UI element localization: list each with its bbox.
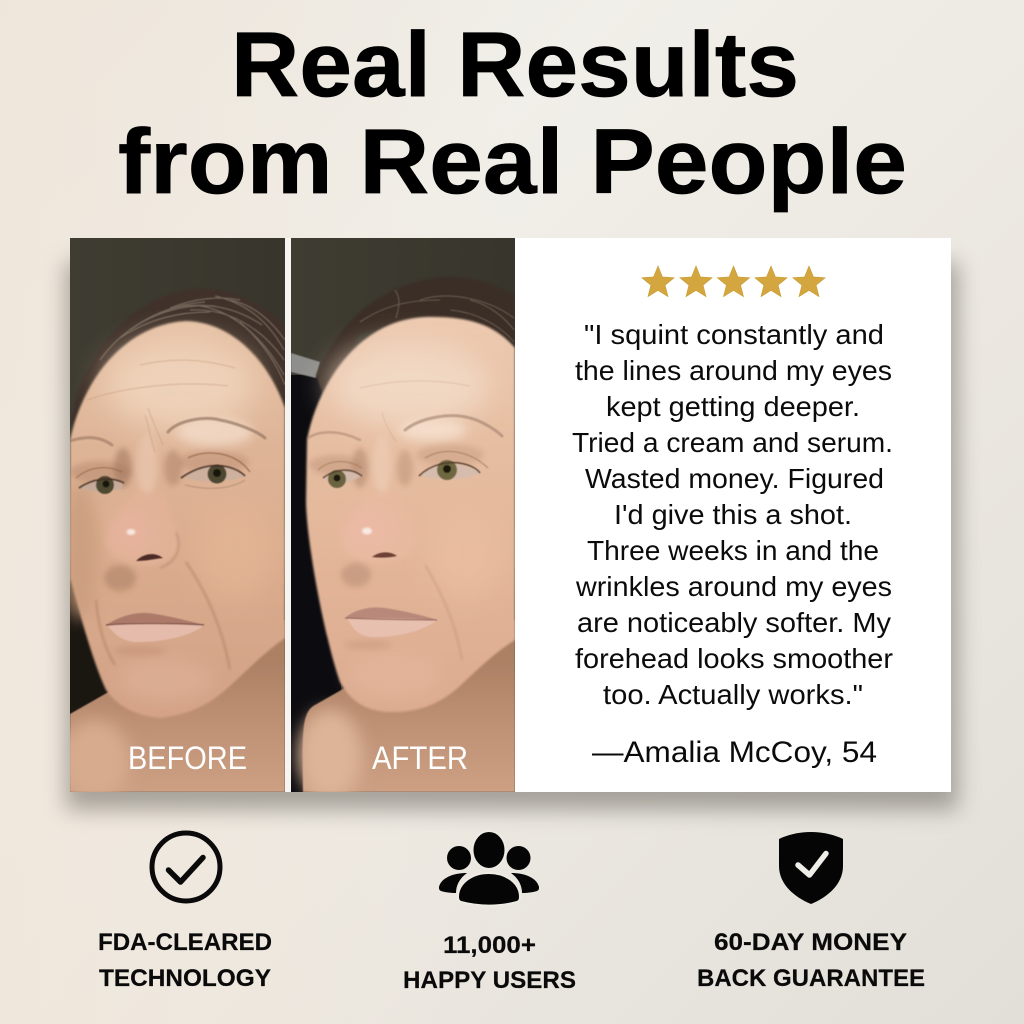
badge text: TECHNOLOGY [99,965,271,992]
forehead lines [360,381,470,442]
smile lines [96,562,230,670]
badge text [98,929,272,992]
icon: check circle [152,833,220,901]
hair [316,277,515,400]
star rating [642,266,825,297]
icon: people group [439,831,539,906]
attribution: —Amalia McCoy, 54 [592,736,877,769]
lips [345,607,437,637]
badge text: BACK GUARANTEE [697,965,925,992]
nose [103,514,180,592]
testimonial quote: are noticeably softer. My [577,607,891,638]
hair [70,288,285,425]
testimonial quote: "I squint constantly and [584,319,884,350]
title: Real Results [231,14,799,116]
testimonial quote [572,319,893,710]
after label: AFTER [372,740,468,776]
testimonial quote: kept getting deeper. [606,391,860,422]
face [306,317,515,712]
badge text: HAPPY USERS [403,967,576,994]
panel: testimonial card [515,238,951,792]
lips [106,613,204,642]
icon: shield check [779,832,843,904]
skin shading [310,322,515,575]
neck [303,620,515,792]
face [70,321,285,718]
badge text [403,932,576,994]
badge text: 60-DAY MONEY [714,929,907,956]
eye left [76,468,124,494]
badge text [697,929,925,992]
badge: FDA cleared [98,833,272,992]
neck [70,620,285,792]
title [118,14,907,213]
testimonial quote: too. Actually works." [603,679,863,710]
testimonial quote: Wasted money. Figured [585,463,884,494]
badge: money back guarantee [697,832,925,992]
forehead lines [87,360,235,452]
testimonial quote: Tried a cream and serum. [572,427,893,458]
skin shading [62,340,277,702]
badge: happy users [403,831,576,994]
panel: after photo [291,238,515,800]
eyebrows [70,418,265,445]
testimonial quote: I'd give this a shot. [614,499,852,530]
testimonial quote: wrinkles around my eyes [575,571,892,602]
testimonial quote: the lines around my eyes [575,355,892,386]
before label: BEFORE [128,740,247,776]
eye left [318,461,362,488]
title: from Real People [118,111,907,213]
testimonial quote: Three weeks in and the [587,535,879,566]
nose [340,520,397,588]
panel: before photo [60,238,285,800]
eyebrows [308,416,502,440]
badge text: FDA-CLEARED [98,929,272,956]
badge text: 11,000+ [443,932,536,959]
testimonial quote: forehead looks smoother [575,643,893,674]
smile lines [425,565,462,660]
eye right [181,453,250,488]
eye right [419,451,488,480]
